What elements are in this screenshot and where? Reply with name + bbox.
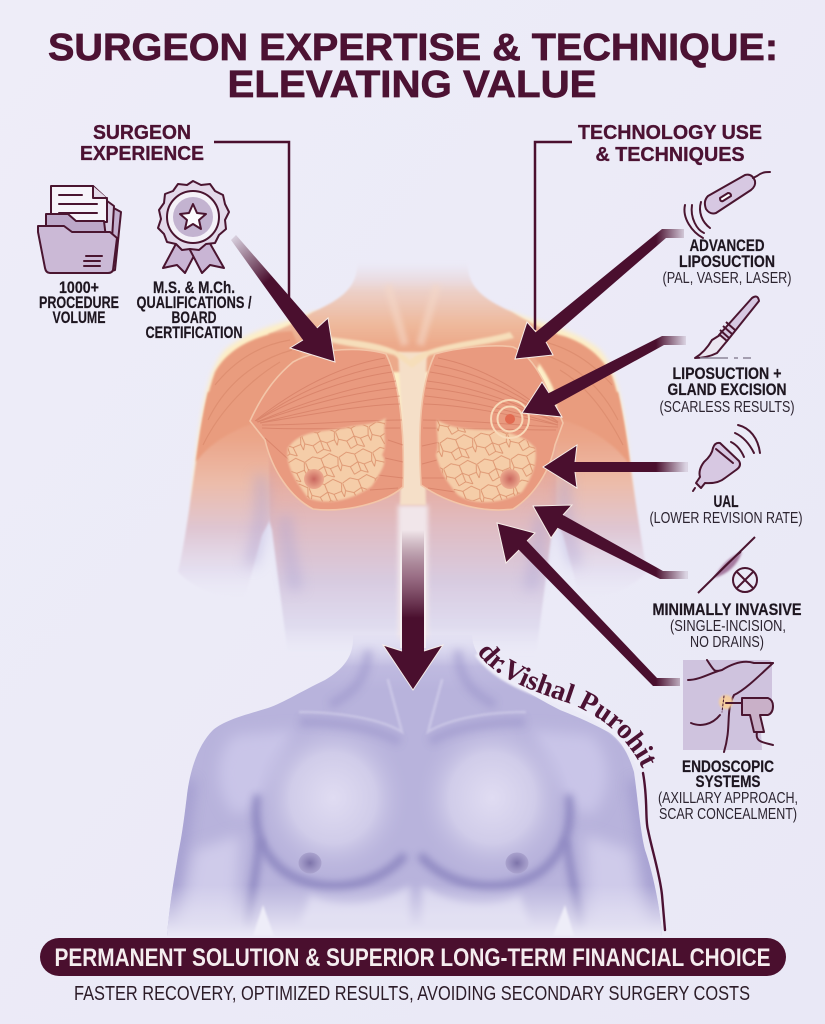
connector: surgeon experience	[214, 142, 289, 300]
arm gaps	[256, 906, 572, 933]
left deltoid	[196, 331, 302, 462]
label: liposuction + gland excision: LIPOSUCTION +	[672, 365, 782, 383]
label: minimally invasive: MINIMALLY INVASIVE	[652, 601, 802, 619]
right pectoral	[434, 737, 550, 859]
title	[48, 27, 778, 106]
heading: technology use: & TECHNIQUES	[596, 143, 744, 166]
icon: folder	[38, 186, 121, 273]
label: procedure volume: 1000+	[59, 279, 99, 297]
sternum strip	[398, 352, 427, 505]
torso	[266, 440, 560, 655]
arrow: down to result	[383, 530, 443, 690]
neck shadows	[300, 650, 525, 742]
heading: technology use	[578, 121, 762, 166]
deltoid fibres	[203, 340, 623, 445]
title: ELEVATING VALUE	[228, 64, 596, 106]
central abdominal band	[398, 505, 428, 640]
centre line and clavicle lines	[299, 680, 526, 734]
left glandular tissue	[287, 418, 386, 502]
label: endoscopic systems: SYSTEMS	[696, 773, 760, 791]
right pectoral	[420, 346, 563, 510]
label: procedure volume	[39, 279, 119, 327]
arrow: endoscopic	[497, 523, 680, 686]
icon: endoscopic approach	[683, 660, 773, 752]
outer arm shadow	[170, 780, 660, 912]
arrow: advanced liposuction	[515, 229, 684, 359]
icon: single incision	[698, 537, 757, 593]
label: qualifications	[136, 279, 252, 342]
left pectoral	[275, 737, 391, 859]
label: liposuction + gland excision: GLAND EXCISION	[668, 381, 786, 399]
gland lobules	[287, 418, 536, 502]
heading: surgeon experience	[80, 121, 204, 165]
icon: liposuction cannula	[684, 172, 770, 238]
icon: scalpel	[695, 297, 759, 358]
icon: ultrasound probe	[693, 425, 760, 491]
abdominal highlights	[305, 886, 526, 920]
neck and trapezius	[268, 262, 557, 372]
connector: technology use	[535, 142, 572, 330]
upper body: before anatomy	[178, 262, 647, 655]
label: UAL	[650, 493, 802, 527]
shoulder glow	[192, 312, 632, 500]
label: advanced liposuction: ADVANCED	[690, 237, 765, 255]
arrow: gland excision	[522, 336, 686, 417]
label: procedure volume: PROCEDURE	[39, 294, 119, 312]
label: liposuction + gland excision	[660, 365, 794, 416]
label: endoscopic systems: ENDOSCOPIC	[682, 758, 774, 776]
icon: award badge	[158, 181, 229, 273]
signature: dr.Vishal Purohit	[479, 646, 655, 768]
label: minimally invasive: NO DRAINS)	[690, 634, 764, 651]
title: SURGEON EXPERTISE & TECHNIQUE:	[48, 27, 778, 69]
label: qualifications: BOARD	[172, 309, 217, 327]
pectoral shadow rims	[248, 795, 580, 930]
right nipple	[506, 852, 528, 874]
right deltoid	[530, 331, 630, 465]
label: qualifications: CERTIFICATION	[146, 324, 242, 342]
label: procedure volume: VOLUME	[52, 309, 106, 327]
clavicles	[330, 332, 514, 368]
muscle fibres	[255, 358, 558, 492]
label: qualifications: M.S. & M.Ch.	[153, 279, 235, 297]
label: advanced liposuction	[662, 237, 792, 287]
label: minimally invasive: (SINGLE-INCISION,	[670, 618, 786, 635]
heading: technology use: TECHNOLOGY USE	[578, 121, 762, 144]
label: endoscopic systems	[658, 758, 798, 823]
forearm highlights	[182, 836, 642, 916]
silhouette	[160, 632, 670, 936]
purple shadows	[250, 475, 576, 590]
neck tendons	[388, 285, 437, 345]
heading: surgeon experience: SURGEON	[93, 121, 191, 144]
label: advanced liposuction: LIPOSUCTION	[679, 253, 775, 271]
label: qualifications: QUALIFICATIONS /	[136, 294, 252, 312]
label: minimally invasive	[652, 601, 802, 651]
heading: surgeon experience: EXPERIENCE	[80, 142, 204, 165]
label: advanced liposuction: (PAL, VASER, LASER)	[662, 270, 792, 287]
left nipple	[298, 852, 322, 874]
left nipple	[304, 469, 324, 489]
right glandular tissue	[436, 420, 536, 502]
deltoid highlights	[219, 730, 607, 815]
left arm	[178, 392, 270, 598]
banner	[40, 938, 786, 976]
arrow: minimally invasive	[533, 505, 688, 579]
bottom fade	[167, 890, 662, 936]
lower body: after result	[160, 632, 670, 936]
target rings	[491, 400, 529, 438]
label: UAL: UAL	[714, 493, 738, 511]
signature flourish	[643, 773, 665, 930]
left pectoral	[250, 349, 403, 510]
right nipple	[500, 469, 520, 489]
arrow: surgeon to chest	[231, 235, 335, 362]
label: liposuction + gland excision: (SCARLESS RESULTS)	[660, 399, 794, 416]
arrow: UAL	[543, 445, 688, 488]
right arm	[556, 392, 647, 598]
